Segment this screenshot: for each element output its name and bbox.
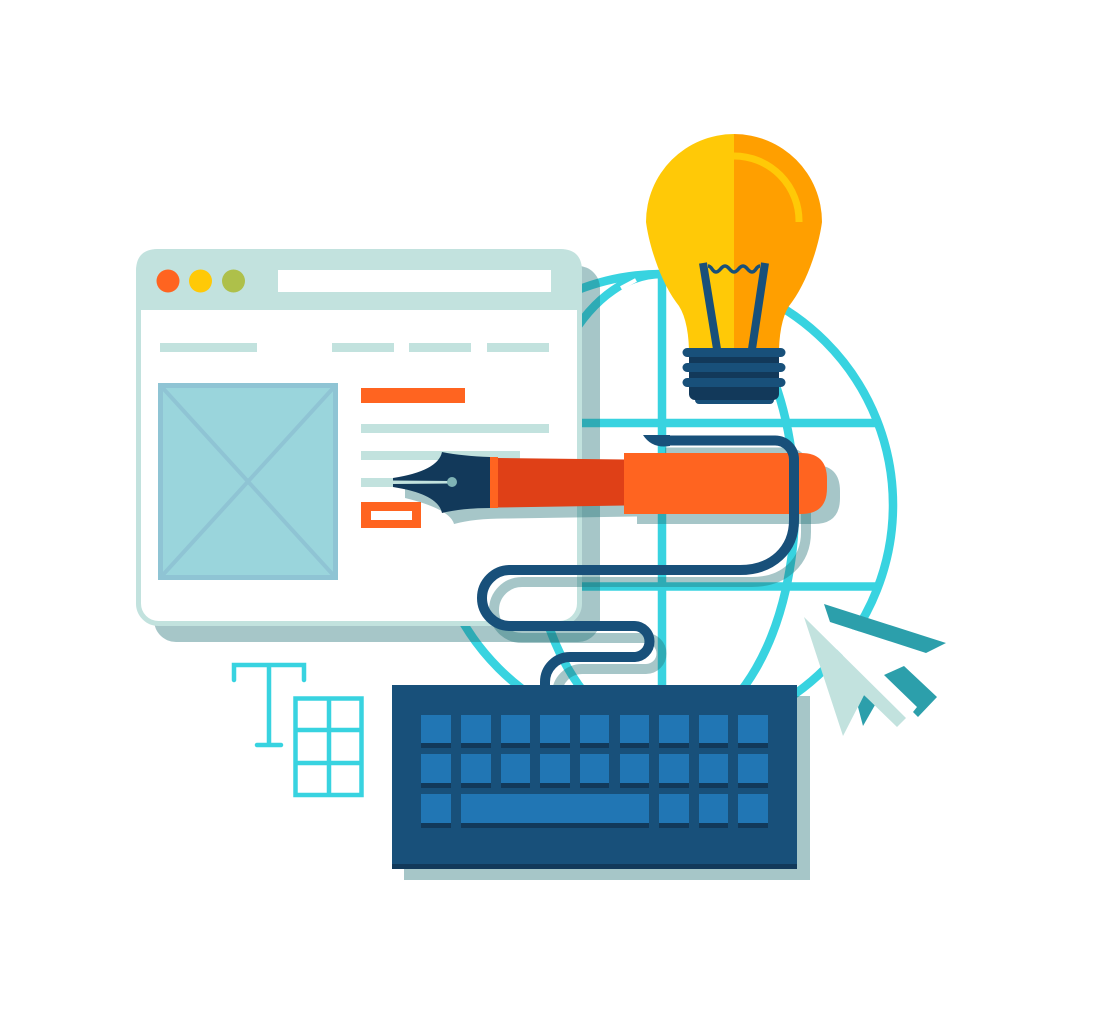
icon: text tool [234, 665, 304, 745]
bulb right half [734, 134, 822, 350]
pen cap [624, 453, 827, 514]
icon: globe [431, 274, 893, 736]
icon: cursor arrow [804, 604, 946, 736]
cursor teal facets [824, 604, 946, 726]
pen collar [490, 457, 498, 508]
bulb screw base [687, 350, 781, 404]
icon: table grid [296, 698, 362, 795]
icon: fountain pen [393, 452, 827, 514]
pen nib [393, 452, 490, 513]
window control dots [156, 270, 245, 292]
cable [482, 435, 794, 690]
filament [703, 263, 765, 349]
icon: light bulb [646, 134, 822, 404]
navigation menu lines [160, 343, 549, 352]
panel: browser window [136, 249, 582, 624]
nib slit and breather hole [393, 477, 457, 487]
orange heading bar [361, 388, 465, 403]
pen barrel [498, 458, 625, 508]
pen shadow [405, 463, 840, 524]
address bar [278, 270, 551, 292]
key shadows [421, 720, 768, 828]
orange button [361, 502, 421, 528]
window title bar [136, 249, 582, 310]
bulb left half [646, 134, 734, 350]
text lines [361, 424, 549, 487]
icon: keyboard [392, 685, 797, 869]
keys [421, 715, 768, 823]
cursor light face [804, 617, 906, 736]
keyboard shadow [404, 696, 810, 880]
cursor white body [804, 617, 926, 718]
image placeholder [160, 386, 336, 578]
bulb highlight [734, 156, 799, 222]
cable shadow [494, 452, 806, 700]
window shadow [154, 266, 600, 642]
